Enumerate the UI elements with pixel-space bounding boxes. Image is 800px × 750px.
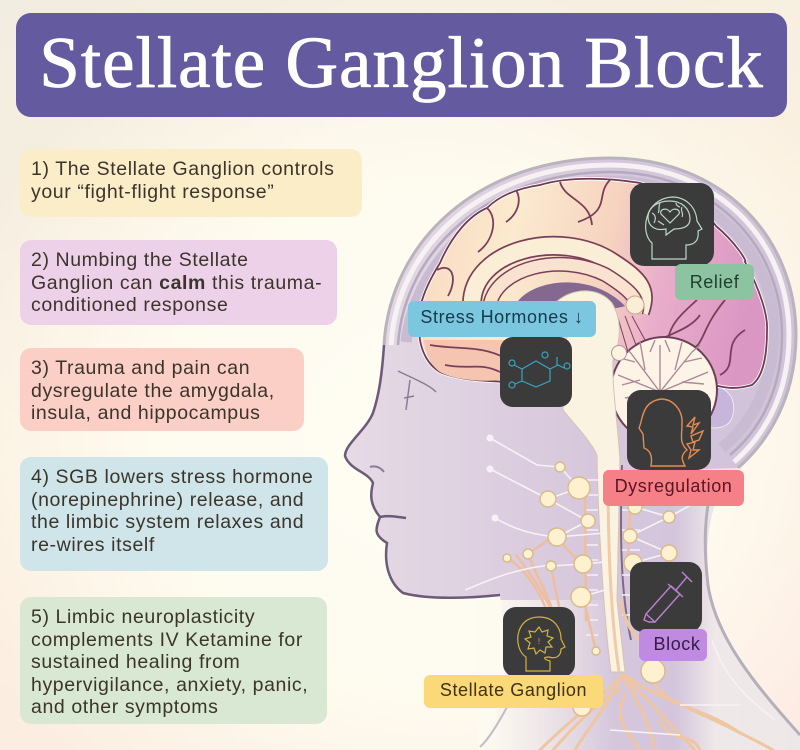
cerebellum [611,337,717,443]
label: Block [639,629,707,661]
panel 2: calm: conditioned response [31,294,228,316]
head silhouette [345,158,800,750]
nerve tree [507,490,773,750]
label: Dysregulation: Dysregulation [615,476,732,496]
front neck outline [480,707,507,747]
icon: head with burst [503,607,575,675]
ventricle [516,282,625,310]
face outline [345,345,500,598]
panel 3: dysregulation [20,348,304,431]
pink brain stem fibres [618,316,645,352]
title banner: Stellate Ganglion Block [39,22,764,103]
panel 2: calm [20,240,337,325]
panel 1: fight-flight [20,149,362,217]
panel 5: neuroplasticity [20,597,327,724]
ganglion nodes [486,434,677,716]
icon: molecule [500,337,572,407]
panel 5: neuroplasticity: sustained healing from [31,651,240,673]
panel 1: fight-flight: 1) The Stellate Ganglion controls [31,158,334,180]
panel 5: neuroplasticity: and other symptoms [31,696,218,718]
eye and mouth marks [370,371,436,518]
label: Stellate Ganglion: Stellate Ganglion [440,680,587,700]
panel 4: SGB: re-wires itself [31,534,155,556]
panel 5: neuroplasticity: complements IV Ketamine for [31,628,303,650]
skull rings [384,158,796,468]
panel 5: neuroplasticity: hypervigilance, anxiety, panic, [31,674,308,696]
brainstem and spinal cord [556,291,625,672]
neck back outline [705,505,800,735]
panel 4: SGB: (norepinephrine) release, and [31,488,304,510]
panel 5: neuroplasticity: 5) Limbic neuroplasticity [31,606,255,628]
icon: syringe [630,562,702,632]
panel 4: SGB: 4) SGB lowers stress hormone [31,466,313,488]
label: Stress Hormones [408,301,596,337]
label: Relief: Relief [690,272,739,292]
panel 3: dysregulation: 3) Trauma and pain can [31,357,250,379]
lower frontal lobe [424,340,505,381]
label: Stellate Ganglion [424,675,603,708]
brain folds [430,180,745,375]
white nerve fibres [465,438,775,735]
brain [419,179,767,388]
spinal rungs [586,480,640,635]
icon: brain with heart [630,183,714,266]
panel 4: SGB: the limbic system relaxes and [31,511,304,533]
label: Dysregulation [603,470,744,506]
panel 3: dysregulation: dysregulate the amygdala, [31,380,275,402]
striped occipital shape [705,386,734,428]
panel 3: dysregulation: insula, and hippocampus [31,402,261,424]
panel 1: fight-flight: your “fight-flight response” [31,180,274,202]
label: Relief [675,264,754,300]
panel 4: SGB [20,457,328,571]
neck light area [675,468,800,750]
corpus callosum bands [472,246,643,312]
panel 2: calm: 2) Numbing the Stellate [31,249,249,271]
label: Block: Block [653,634,700,654]
icon: head with burst: ! [538,637,540,646]
icon: head with lightning [627,390,711,470]
label: Stress Hormones: Stress Hormones ↓ [420,307,584,327]
panel 2: calm: Ganglion can calm this trauma- [31,272,322,294]
band tip [626,296,644,314]
